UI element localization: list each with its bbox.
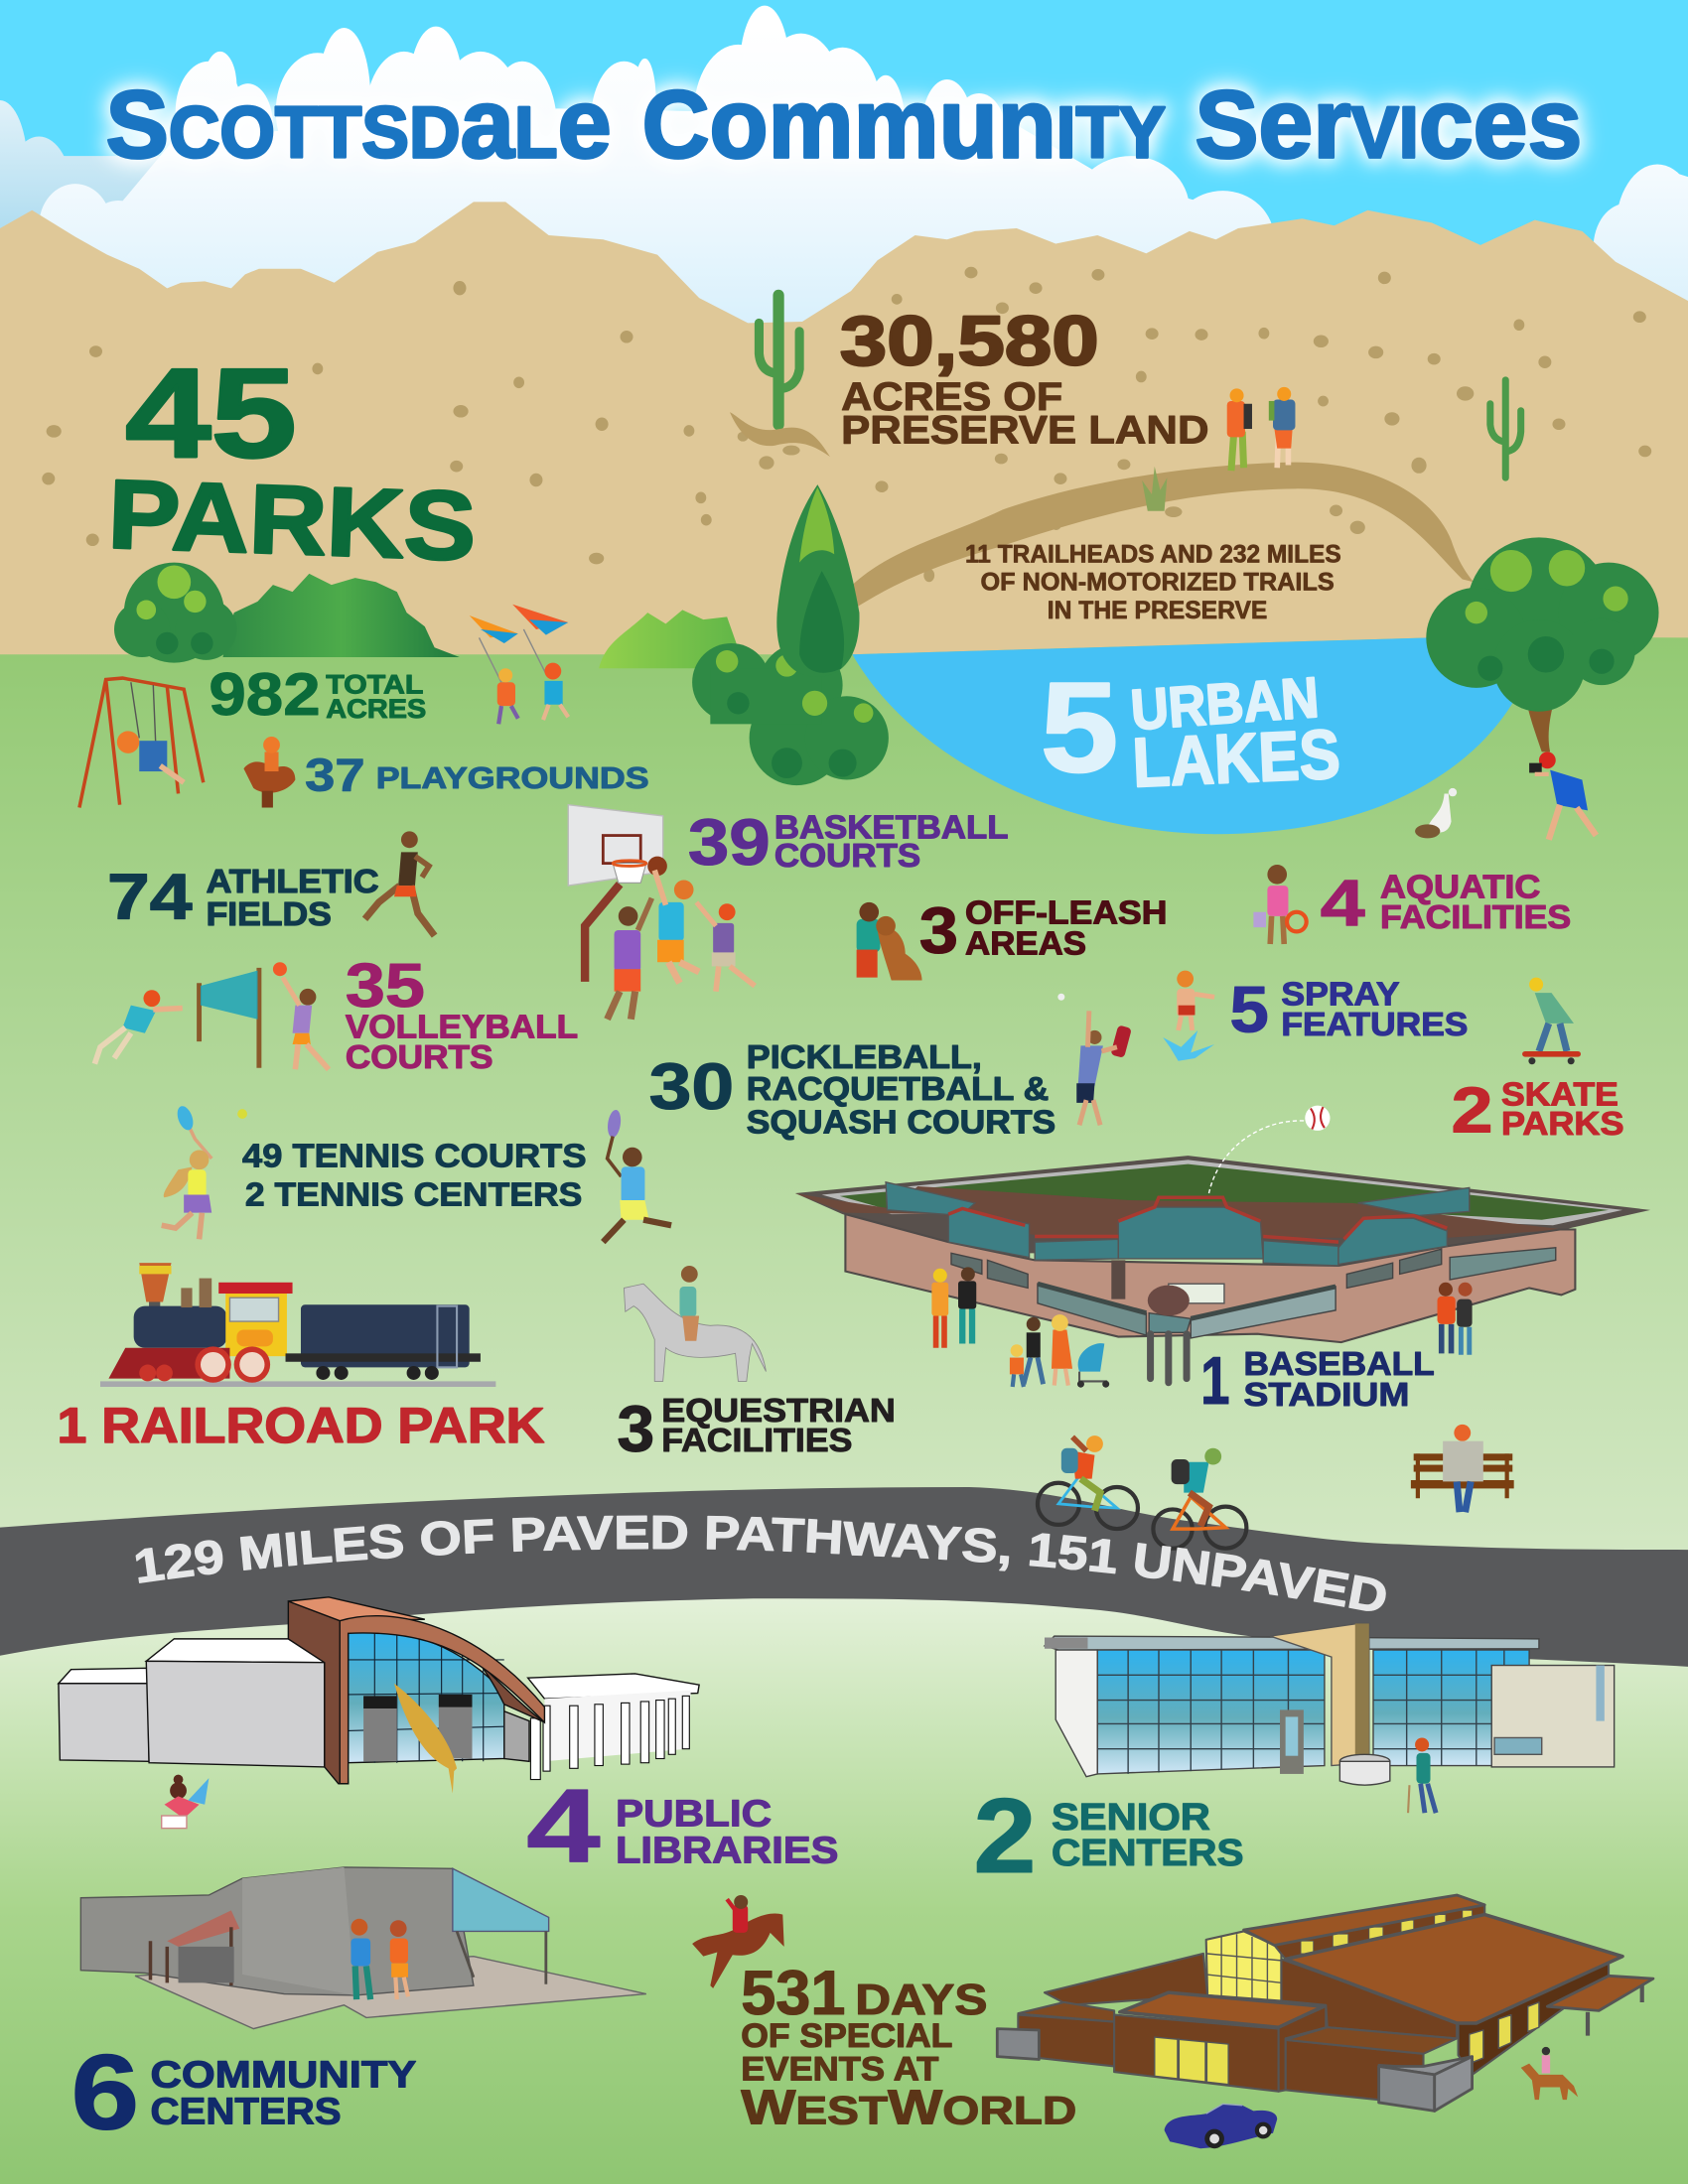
lake: [852, 636, 1512, 834]
531 days text: DAYS: [855, 1977, 987, 2024]
spring rider: [243, 737, 295, 808]
2 skate parks: SKATE: [1501, 1077, 1618, 1114]
3 equestrian facilities: EQUESTRIAN: [661, 1393, 896, 1430]
tennis player: left: [162, 1104, 247, 1239]
trail: [852, 463, 1474, 610]
tennis player: right: [603, 1109, 671, 1242]
45 parks: [106, 342, 478, 581]
11 trailheads text: OF NON-MOTORIZED TRAILS: [980, 570, 1335, 597]
3 equestrian facilities: [617, 1392, 896, 1465]
spray kid: [1163, 971, 1214, 1061]
1 baseball stadium: STADIUM: [1244, 1376, 1409, 1413]
5 spray features: FEATURES: [1281, 1007, 1468, 1043]
5 urban lakes: 5: [1041, 656, 1118, 799]
2 skate parks: [1452, 1074, 1623, 1146]
cypress tree: [776, 484, 860, 677]
person and dog: [857, 902, 922, 980]
531 days text: [741, 1959, 1076, 2135]
5 spray features: SPRAY: [1281, 977, 1400, 1014]
cactus: large: [759, 295, 799, 425]
74 athletic fields: FIELDS: [207, 896, 332, 933]
bush: light green: [599, 610, 745, 668]
3 off-leash areas: 3: [919, 893, 958, 967]
4 aquatic facilities: FACILITIES: [1380, 899, 1571, 936]
title: CommunITY: [642, 68, 1166, 179]
grass tuft: [1142, 467, 1167, 511]
library: [59, 1597, 699, 1784]
3 off-leash areas: OFF-LEASH: [965, 894, 1167, 931]
2 skate parks: 2: [1452, 1074, 1493, 1146]
39 basketball courts: COURTS: [774, 837, 920, 874]
5 spray features: 5: [1230, 972, 1269, 1045]
tree: right: [1426, 537, 1659, 751]
1 baseball stadium: BASEBALL: [1244, 1345, 1435, 1382]
reader: [162, 1775, 209, 1829]
4 aquatic facilities: [1321, 866, 1571, 939]
title: SCOTTSDaLe: [106, 68, 612, 179]
5 urban lakes: LAKES: [1131, 715, 1341, 801]
6 community centers: [71, 2032, 416, 2152]
30,580 acres text: 30,580: [840, 302, 1099, 379]
49 tennis courts text: [242, 1137, 587, 1213]
feather: [394, 1684, 457, 1794]
6 community centers: 6: [71, 2032, 139, 2152]
2 senior centers: [973, 1777, 1244, 1895]
5 urban lakes: URBAN: [1129, 666, 1321, 743]
5 urban lakes: [1041, 656, 1341, 801]
37 playgrounds: PLAYGROUNDS: [376, 762, 649, 795]
30 pickleball text: RACQUETBALL &: [747, 1071, 1049, 1108]
4 public libraries: 4: [526, 1768, 601, 1884]
49 tennis courts text: 2 TENNIS CENTERS: [245, 1176, 582, 1213]
swing set: [79, 678, 204, 808]
lower lawn: [0, 1573, 1688, 2184]
39 basketball courts: 39: [688, 805, 771, 879]
photographer: [1529, 751, 1596, 840]
kids with kites: [470, 605, 568, 724]
title: SerVIces: [1195, 68, 1582, 179]
30,580 acres text: PRESERVE LAND: [841, 409, 1208, 453]
mountains: [0, 202, 1688, 668]
30 pickleball text: SQUASH COURTS: [747, 1105, 1055, 1142]
39 basketball courts: BASKETBALL: [774, 808, 1009, 845]
74 athletic fields: 74: [107, 862, 193, 933]
30,580 acres text: ACRES OF: [841, 375, 1062, 419]
bushes: left: [114, 563, 460, 663]
4 public libraries: PUBLIC: [616, 1794, 772, 1836]
45 parks: 45: [125, 342, 297, 484]
6 community centers: CENTERS: [150, 2092, 342, 2133]
dirt mound: [730, 412, 830, 457]
sky: [0, 0, 1688, 668]
3 equestrian facilities: 3: [617, 1392, 654, 1465]
pickleball player: [1057, 994, 1132, 1125]
basketball players: [608, 871, 755, 1020]
volleyball net and players: [94, 962, 329, 1069]
1 baseball stadium: 1: [1200, 1344, 1230, 1419]
37 playgrounds: 37: [305, 750, 364, 801]
49 tennis courts text: 49 TENNIS COURTS: [242, 1137, 587, 1173]
rocks: [42, 267, 1651, 582]
train: [100, 1263, 495, 1387]
531 days text: EVENTS AT: [741, 2051, 938, 2089]
45 parks: PARKS: [106, 459, 478, 581]
title: [106, 68, 1582, 179]
6 community centers: COMMUNITY: [150, 2055, 416, 2097]
baseball stadium: [795, 1156, 1650, 1383]
3 off-leash areas: [919, 893, 1167, 967]
1 railroad park: 1 RAILROAD PARK: [58, 1398, 544, 1453]
4 aquatic facilities: 4: [1321, 866, 1365, 939]
5 spray features: [1230, 972, 1468, 1045]
man on bench: [1411, 1425, 1514, 1512]
4 aquatic facilities: AQUATIC: [1380, 870, 1540, 906]
3 off-leash areas: AREAS: [965, 924, 1086, 961]
senior with cane: [1408, 1737, 1436, 1813]
30 pickleball text: 30: [649, 1049, 734, 1123]
3 equestrian facilities: FACILITIES: [661, 1423, 852, 1459]
531 days text: W EST W ORLD: [741, 2082, 1076, 2135]
girl with float ring: [1253, 865, 1307, 944]
horse and rider small: [1521, 2047, 1578, 2100]
39 basketball courts: [688, 805, 1009, 879]
11 trailheads text: [965, 542, 1341, 624]
11 trailheads text: IN THE PRESERVE: [1048, 598, 1267, 624]
skater: [1522, 978, 1581, 1064]
community center: [80, 1867, 646, 2029]
hikers: [1227, 387, 1295, 471]
531 days text: OF SPECIAL: [741, 2017, 952, 2055]
982 total acres: ACRES: [326, 694, 426, 724]
74 athletic fields: ATHLETIC: [207, 864, 379, 900]
982 total acres: TOTAL: [326, 670, 423, 700]
classic car: [1165, 2104, 1277, 2148]
2 senior centers: 2: [973, 1777, 1037, 1895]
bushes: centre: [692, 643, 889, 785]
982 total acres: 982: [209, 660, 321, 728]
2 senior centers: CENTERS: [1052, 1833, 1244, 1874]
horse and rider: [624, 1266, 766, 1381]
30,580 acres text: [840, 302, 1208, 453]
531 days text: 531: [741, 1959, 845, 2028]
stadium visitors: [931, 1267, 1473, 1388]
WestWorld building: [997, 1895, 1653, 2111]
30 pickleball text: PICKLEBALL,: [747, 1039, 982, 1076]
goose and duck: [1415, 788, 1457, 838]
37 playgrounds: [305, 750, 649, 801]
35 volleyball courts: COURTS: [346, 1039, 493, 1076]
road label: 129 MILES OF PAVED PATHWAYS, 151 UNPAVED: [135, 1515, 1386, 1611]
lawn: [0, 636, 1688, 1573]
35 volleyball courts: 35: [346, 952, 425, 1021]
30 pickleball text: [649, 1039, 1055, 1142]
bronco rider: [692, 1895, 784, 1988]
74 athletic fields: [107, 862, 379, 933]
paved pathway road: [0, 1487, 1688, 1667]
1 baseball stadium: [1200, 1344, 1435, 1419]
cyclists: [1038, 1435, 1246, 1549]
4 public libraries: LIBRARIES: [616, 1831, 838, 1872]
11 trailheads text: 11 TRAILHEADS AND 232 MILES: [965, 542, 1341, 569]
982 total acres: [209, 660, 426, 728]
baseball and arc: [1208, 1106, 1331, 1193]
senior center: [1045, 1623, 1615, 1785]
2 skate parks: PARKS: [1501, 1106, 1623, 1143]
cactus: small: [1490, 380, 1521, 478]
35 volleyball courts: [346, 952, 578, 1076]
35 volleyball courts: VOLLEYBALL: [346, 1010, 578, 1046]
basketball hoop: [568, 805, 667, 982]
runner: [364, 831, 435, 936]
4 public libraries: [526, 1768, 838, 1884]
clouds: [0, 6, 1688, 335]
2 senior centers: SENIOR: [1052, 1797, 1210, 1839]
